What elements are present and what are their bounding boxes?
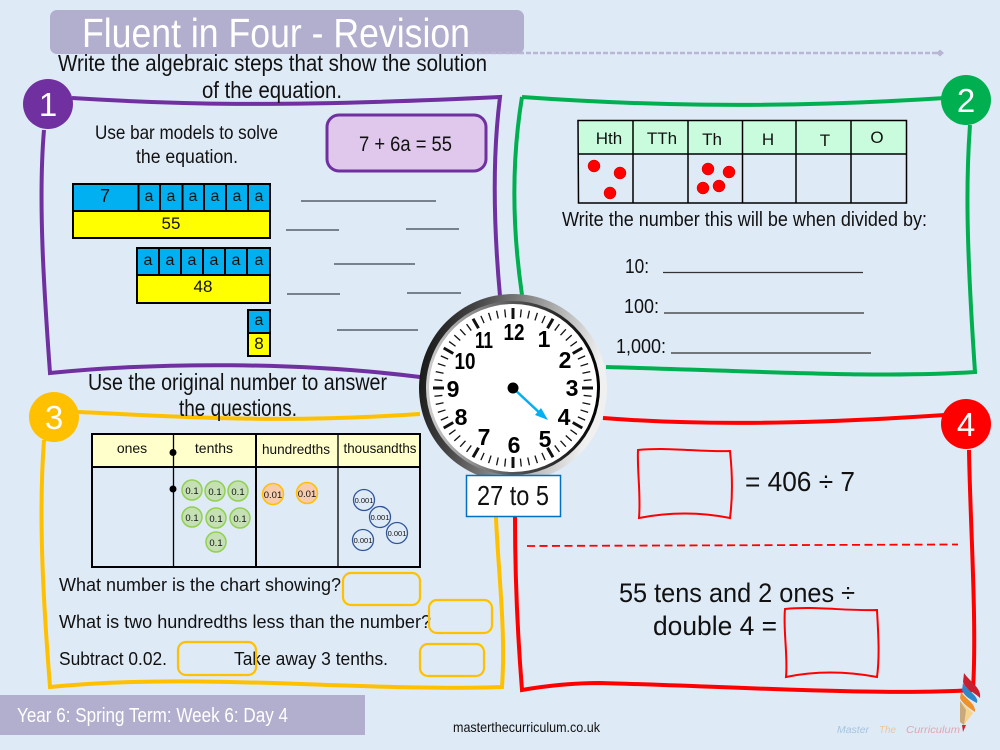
footer banner [0, 695, 365, 735]
bar model row 1: a [167, 188, 176, 205]
bar model row 2: 48 [194, 277, 212, 296]
equation 2: 55 tens and 2 ones ÷ [619, 578, 855, 608]
answer rows: 10: [625, 256, 649, 278]
decimal place value chart: hundredths [262, 441, 330, 457]
panel 3 questions: What is two hundredths less than the number? [59, 612, 431, 632]
title banner [50, 10, 944, 56]
clock: 11 [475, 327, 493, 353]
decimal place value chart: 0.1 [209, 514, 223, 525]
panel 1 heading: Write the algebraic steps that show the solution [58, 50, 487, 76]
decimal place value chart: 0.1 [231, 487, 245, 498]
place value table [578, 120, 906, 203]
panel 1: algebra bar models [23, 50, 500, 377]
logo: pencil and brand name [837, 673, 980, 736]
decimal place value chart: 0.001 [355, 496, 373, 505]
panel 3 number badge: 3 [45, 399, 63, 436]
decimal place value chart: 0.1 [209, 538, 223, 549]
answer box 1 [638, 449, 732, 518]
panel 3 questions: Take away 3 tenths. [234, 649, 388, 669]
bar model row 2: a [144, 252, 153, 269]
title banner: Fluent in Four - Revision [82, 10, 470, 56]
bar model row 1 [73, 184, 270, 238]
answer rows: 100: [624, 296, 659, 318]
decimal place value chart: ones [117, 440, 147, 456]
bar model row 1: a [145, 188, 154, 205]
logo: pencil and brand name: The [879, 725, 896, 736]
bar model row 1: 7 [100, 186, 110, 206]
answer box 2 [785, 608, 879, 677]
logo: pencil and brand name: Curriculum [906, 725, 960, 736]
decimal place value chart: 0.01 [298, 489, 316, 500]
clock: 3 [566, 375, 578, 401]
panel 3 questions [59, 575, 431, 669]
place value table: Th [702, 130, 722, 149]
bar model row 1: a [255, 188, 264, 205]
decimal place value chart: 0.1 [233, 514, 247, 525]
answer rows [616, 256, 871, 358]
place value table: H [762, 130, 774, 149]
answer lines [286, 201, 461, 330]
panel 1 instruction: the equation. [136, 146, 238, 168]
clock: 12 [504, 319, 524, 345]
answer rows: 1,000: [616, 336, 666, 358]
bar model row 3: a [255, 312, 264, 329]
panel 3 questions: What number is the chart showing? [59, 575, 341, 595]
time label [466, 476, 560, 516]
bar model row 2: a [166, 252, 175, 269]
bar model row 1: 55 [162, 214, 180, 233]
clock: 5 [539, 426, 552, 452]
website address: masterthecurriculum.co.uk [453, 719, 601, 735]
place value table: TTh [647, 129, 677, 148]
bar model row 1: a [233, 188, 242, 205]
bar model row 1: a [189, 188, 198, 205]
logo: pencil and brand name: Master [837, 725, 870, 736]
decimal place value chart: 0.1 [185, 486, 199, 497]
panel 3 heading: Use the original number to answer [88, 369, 387, 395]
bar model row 2: a [210, 252, 219, 269]
place value table: T [820, 131, 830, 150]
place value table: Hth [596, 129, 622, 148]
decimal place value chart: tenths [195, 440, 233, 456]
panel 2 question: Write the number this will be when divided by: [562, 209, 927, 231]
panel 4: division questions [515, 399, 991, 692]
decimal place value chart: 0.01 [264, 490, 282, 501]
place value table: O [870, 128, 884, 147]
equation box: 7 + 6a = 55 [359, 133, 452, 156]
bar model row 2 [137, 248, 270, 303]
panel 3 questions: Subtract 0.02. [59, 649, 167, 669]
clock: 2 [559, 347, 571, 373]
dashed divider [527, 544, 958, 546]
footer banner: Year 6: Spring Term: Week 6: Day 4 [17, 705, 288, 727]
panel 2 number badge: 2 [957, 82, 975, 119]
bar model row 2: a [232, 252, 241, 269]
decimal place value chart: 0.1 [185, 513, 199, 524]
bar model row 3 [248, 310, 270, 356]
bar model row 1: a [211, 188, 220, 205]
decimal place value chart [92, 434, 420, 567]
equation 1: = 406 ÷ 7 [745, 466, 855, 497]
panel 1 heading: of the equation. [202, 77, 342, 103]
panel 4 number badge: 4 [957, 406, 975, 443]
decimal place value chart: 0.001 [354, 536, 372, 545]
decimal place value chart: 0.001 [371, 513, 389, 522]
clock: 6 [508, 432, 520, 458]
clock: 7 [478, 424, 490, 450]
clock: 8 [455, 404, 468, 430]
decimal place value chart: 0.1 [208, 487, 222, 498]
clock: 4 [558, 404, 571, 430]
equation 2: double 4 = [653, 611, 777, 641]
bar model row 2: a [188, 252, 197, 269]
equation box [327, 115, 486, 171]
panel 3 number badge [29, 392, 79, 442]
clock: 10 [454, 348, 476, 374]
panel 2 number badge [941, 75, 991, 125]
clock: 9 [447, 376, 459, 402]
panel 3 answer boxes [178, 573, 492, 676]
time label: 27 to 5 [477, 480, 549, 511]
clock [419, 294, 607, 482]
decimal place value chart: thousandths [344, 440, 416, 456]
panel 1 number badge [23, 79, 73, 129]
panel 1 instruction: Use bar models to solve [95, 122, 278, 144]
panel 2: place value division [514, 75, 991, 375]
bar model row 2: a [255, 252, 264, 269]
panel 3: decimal chart [29, 369, 503, 688]
panel 3 heading: the questions. [179, 395, 297, 421]
bar model row 3: 8 [254, 334, 264, 353]
clock: 1 [538, 326, 551, 352]
panel 1 number badge: 1 [39, 86, 57, 123]
decimal place value chart: 0.001 [388, 529, 406, 538]
panel 4 number badge [941, 399, 991, 449]
